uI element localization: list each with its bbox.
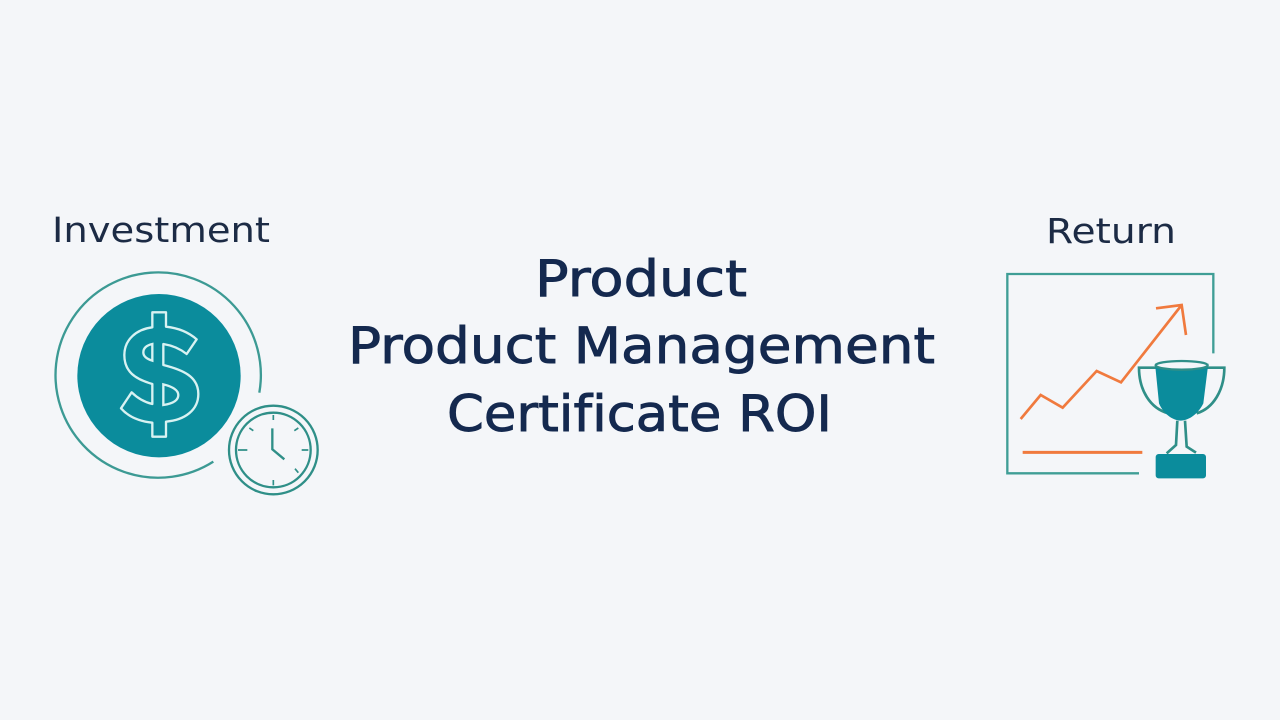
heading: Return: Return: [1046, 212, 1176, 252]
icon: dollar coin: [56, 272, 261, 478]
icon: trophy: [1139, 361, 1224, 478]
heading: Investment: Investment: [52, 211, 270, 251]
icon: growth chart: [1007, 274, 1213, 473]
icon: clock: [229, 406, 318, 494]
title: Product: [535, 250, 747, 308]
title: Certificate ROI: [447, 385, 832, 443]
title: Product Management: [348, 317, 935, 375]
title: [348, 250, 935, 443]
